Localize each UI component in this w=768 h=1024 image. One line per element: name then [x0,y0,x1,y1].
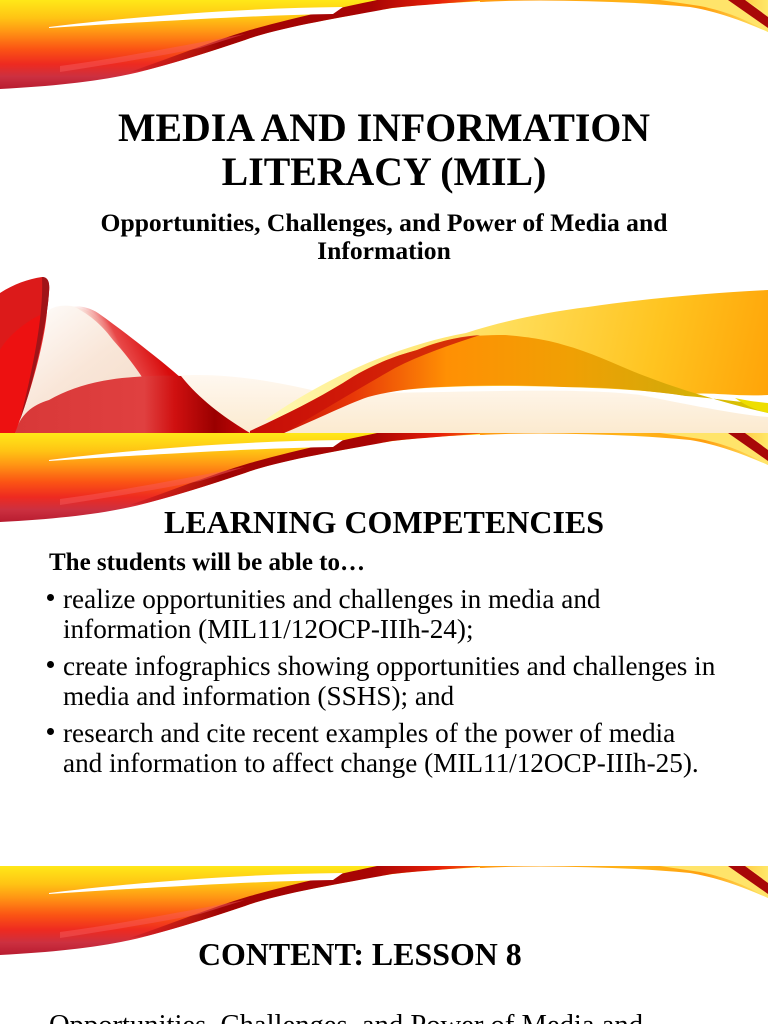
subtitle [101,208,668,265]
pale background waves [170,375,768,433]
bullet 1 [47,584,601,644]
orange ribbon [250,335,768,433]
title [118,106,650,194]
subtitle: Information [317,236,451,265]
pale hill [15,306,181,433]
bullet 3: and information to affect change (MIL11/12OCP-IIIh-25). [63,748,699,778]
top ribbon banner [0,866,768,955]
red hill edge [72,306,181,378]
bullet 2: media and information (SSHS); and [63,681,454,711]
top ribbon banner [0,0,768,89]
subtitle: Opportunities, Challenges, and Power of Media and [101,208,667,237]
title: LITERACY (MIL) [222,150,546,194]
title: MEDIA AND INFORMATION [118,106,650,150]
bottom ribbon artwork [0,277,768,433]
orange ribbon dark edge [250,335,480,433]
intro line: The students will be able to… [49,549,365,576]
slide 2: learning competencies [0,433,768,866]
bullet 2: create infographics showing opportunities and challenges in [63,651,715,681]
bullet 3: research and cite recent examples of the power of media [63,718,675,748]
yellow ribbon tip [735,398,768,413]
bullet 1: information (MIL11/12OCP-IIIh-24); [63,614,474,644]
bullet 2 [47,651,715,711]
tall red petal [0,277,49,433]
bullet list [47,584,715,778]
gold ribbon [265,290,768,420]
bullet 1: realize opportunities and challenges in media and [63,584,601,614]
bullet 3 [47,718,699,778]
heading: LEARNING COMPETENCIES [164,504,604,540]
heading: CONTENT: LESSON 8 [198,937,522,972]
top ribbon banner [0,433,768,522]
red fold [15,376,250,433]
slide 3: content [0,866,768,1024]
slide 1: title slide [0,0,768,433]
